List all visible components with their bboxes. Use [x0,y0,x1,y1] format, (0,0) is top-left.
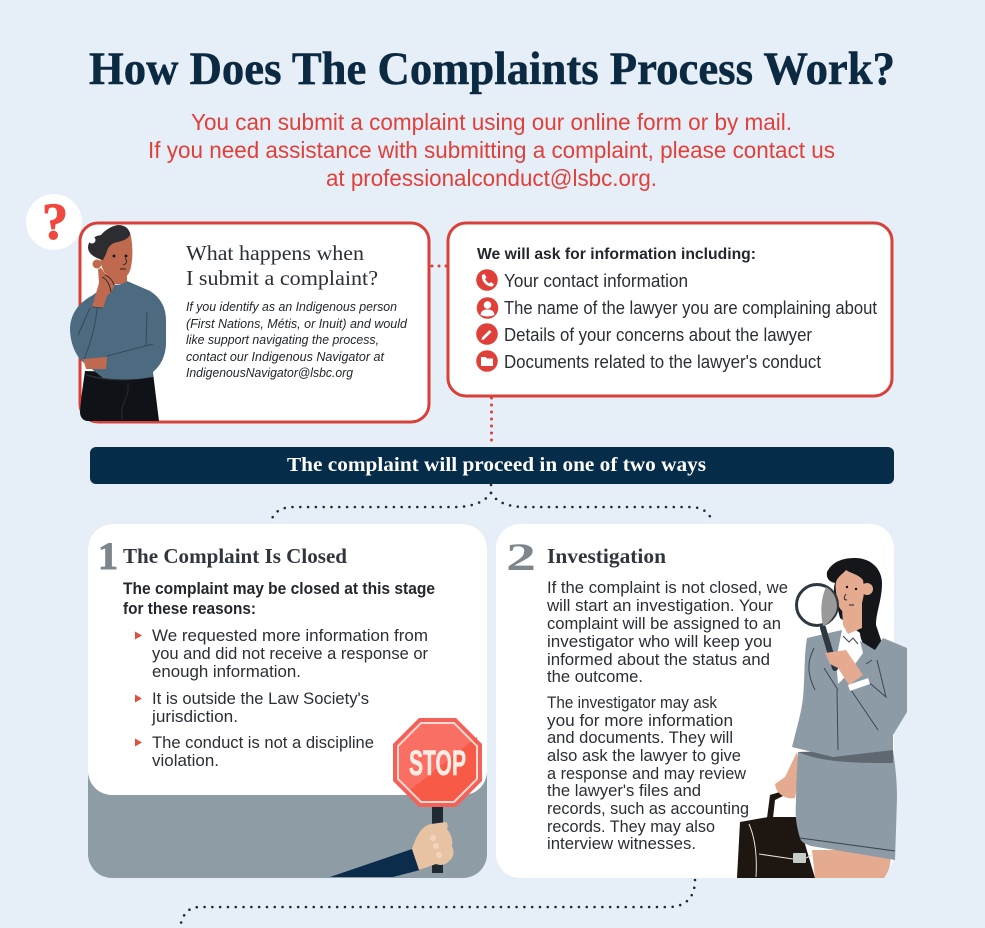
text: investigation paragraph 1: informed about the status and [547,650,770,669]
raised hand and forearm [92,268,116,308]
bullet list: jurisdiction. [151,707,238,726]
text: investigation paragraph 1: If the complaint is not closed, we [547,578,788,597]
hair [88,225,130,260]
skirt [796,750,897,860]
text: investigation paragraph 2: a response and may review [547,764,747,783]
bullet list [135,626,428,770]
icon: question mark bubble [26,194,82,251]
text: investigation paragraph 2: interview witnesses. [547,834,696,853]
face [92,260,102,268]
title: How Does The Complaints Process Work? [89,43,895,95]
text: investigation paragraph 1: complaint will be assigned to an [547,614,781,633]
bullet list: The conduct is not a discipline [152,733,374,752]
heading: what happens: What happens when [186,241,364,265]
text: Indigenous Navigator note: contact our Indigenous Navigator at [186,350,385,364]
text: reasons intro: The complaint may be closed at this stage [123,580,435,598]
panel: complaint is closed [88,524,487,878]
text: investigation paragraph 2 [547,693,749,853]
connector: red dotted lines [432,266,492,447]
trousers [80,371,159,421]
bullet list: enough information. [152,662,301,681]
text: investigation paragraph 1: the outcome. [547,667,643,686]
lower hand [83,357,107,369]
panel: investigation [496,524,894,878]
heading: what happens [186,241,378,290]
hair back [827,558,886,660]
heading: what happens: I submit a complaint? [186,266,378,290]
panel: information requested [448,223,892,396]
text: investigation paragraph 1: will start an investigation. Your [546,596,773,615]
bullet list: you and did not receive a response or [152,644,428,663]
text: Indigenous Navigator note: (First Nations, Métis, or Inuit) and would [186,317,408,331]
text: investigation paragraph 1: investigator who will keep you [547,632,772,651]
intro text: at professionalconduct@lsbc.org. [326,165,657,191]
connector: dark dotted lines [181,485,711,923]
text: Indigenous Navigator note [186,300,408,380]
bullet list: It is outside the Law Society's [152,689,369,708]
numeral 2: 2 [506,536,536,579]
hand on briefcase [775,752,800,798]
intro text: If you need assistance with submitting a complaint, please contact us [148,137,835,163]
item: concerns: Details of your concerns about the lawyer [504,325,812,345]
icon: question mark bubble: ? [42,194,68,251]
text: investigation paragraph 2: you for more information [547,711,733,730]
neck [104,262,127,284]
hand holding magnifier [825,650,863,685]
text: investigation paragraph 2: records, such as accounting [547,799,749,818]
illustration: hand holding stop sign [330,718,482,877]
heading: complaint closed: The Complaint Is Closed [123,544,347,568]
heading: investigation: Investigation [547,544,666,568]
icon: phone [476,269,498,291]
icon: person [477,297,498,319]
icon: folder [476,350,498,372]
briefcase [737,791,815,878]
text: investigation paragraph 1 [546,578,788,686]
neck and face [842,600,862,634]
illustration: hand holding stop sign: STOP [409,744,466,783]
intro text [148,109,835,191]
banner [90,447,894,484]
heading: information requested: We will ask for information including: [477,246,756,263]
panel: what happens [80,223,429,422]
illustration: woman with magnifying glass and briefcase [737,558,907,878]
stop sign [393,718,482,807]
cuff [848,678,870,691]
numeral 1: 1 [98,535,118,578]
text: Indigenous Navigator note: like support navigating the process, [186,333,379,347]
item: lawyer name: The name of the lawyer you are complaining about [504,298,877,318]
text: investigation paragraph 2: and documents. They will [547,728,733,747]
bullet list: We requested more information from [152,626,428,645]
item: documents: Documents related to the lawyer's conduct [504,352,821,372]
text: investigation paragraph 2: also ask the lawyer to give [547,746,741,765]
intro text: You can submit a complaint using our online form or by mail. [191,109,792,135]
text: investigation paragraph 2: The investigator may ask [547,693,717,712]
banner: The complaint will proceed in one of two ways [287,454,706,476]
illustration: thinking man [70,225,166,421]
sweater [70,281,166,379]
text: reasons intro [123,580,435,618]
legs [812,850,891,878]
text: investigation paragraph 2: records. They may also [547,817,715,836]
blouse [836,625,863,684]
jacket [792,630,907,757]
text: Indigenous Navigator note: IndigenousNavigator@lsbc.org [186,366,353,380]
bullet list: violation. [152,751,219,770]
magnifying glass [796,584,838,668]
text: Indigenous Navigator note: If you identify as an Indigenous person [186,300,397,314]
icon: pencil [476,323,498,345]
item: contact: Your contact information [504,271,688,291]
text: investigation paragraph 2: the lawyer's files and [547,781,701,800]
text: reasons intro: for these reasons: [123,600,256,618]
